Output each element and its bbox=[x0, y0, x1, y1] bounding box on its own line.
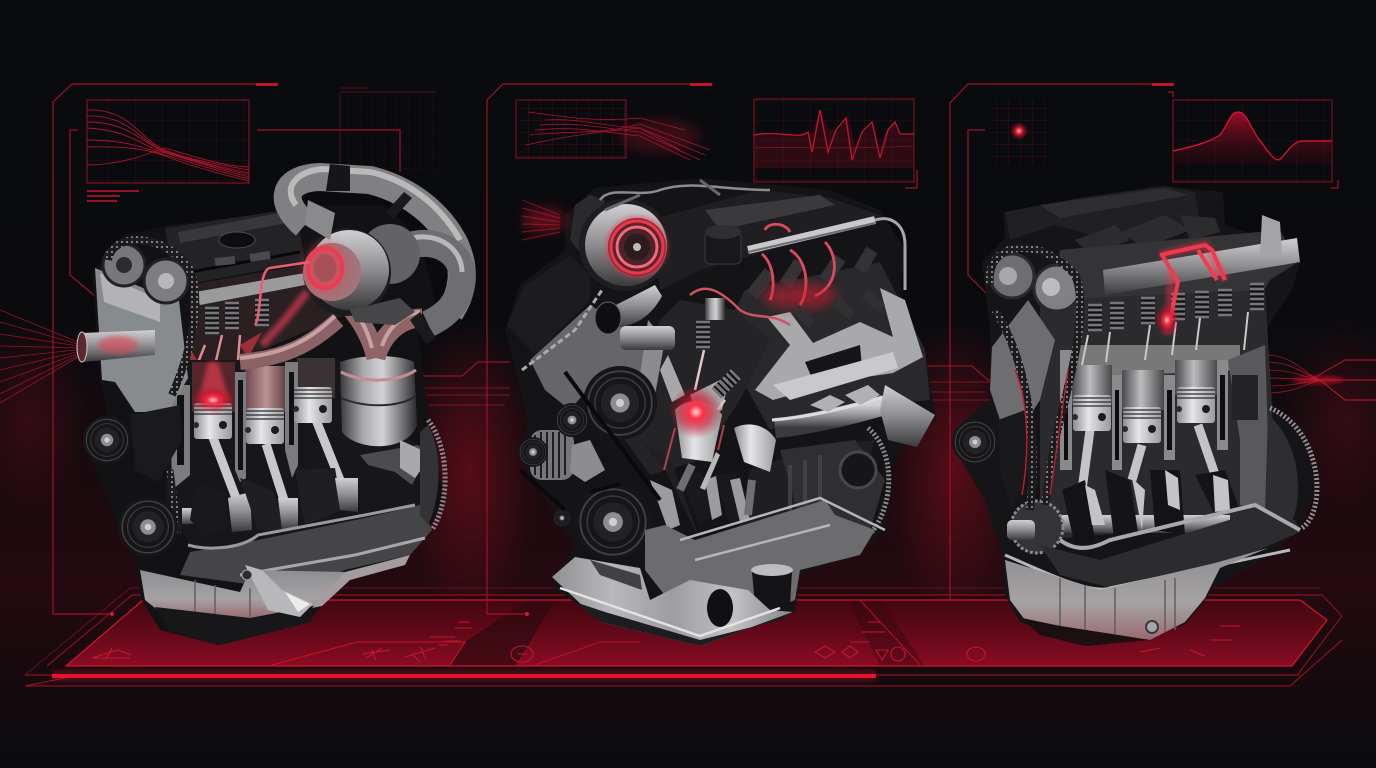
bracket silver mid bbox=[645, 500, 875, 640]
crankshaft bbox=[1020, 515, 1230, 533]
connecting rods bbox=[680, 465, 752, 515]
central cutaway bbox=[625, 300, 770, 475]
sump bbox=[1005, 548, 1268, 640]
heat shield bracket bbox=[360, 445, 428, 485]
lower block bbox=[640, 440, 875, 540]
connecting rods bbox=[1082, 425, 1222, 495]
pistons bbox=[193, 403, 232, 439]
left timing plate bbox=[990, 300, 1055, 435]
panel 1 frame bbox=[53, 83, 400, 616]
right head bbox=[720, 262, 930, 430]
silhouette bbox=[84, 205, 445, 645]
block interior bbox=[165, 360, 425, 545]
block bbox=[1040, 290, 1275, 540]
turbo housing bbox=[579, 199, 671, 291]
pink exhaust manifold bbox=[240, 320, 338, 362]
sump bbox=[552, 557, 793, 646]
pistons bbox=[675, 402, 722, 462]
injector lines red bbox=[762, 224, 834, 305]
intake flare bbox=[522, 200, 567, 240]
injector bodies bbox=[752, 250, 872, 295]
timing chain bbox=[108, 240, 195, 395]
cylinders bbox=[1072, 365, 1112, 405]
oil filter bbox=[752, 568, 792, 612]
connecting rods bbox=[212, 435, 236, 498]
valve springs bbox=[1088, 305, 1102, 330]
circuit traces bbox=[410, 362, 1000, 405]
flywheel bbox=[868, 428, 889, 532]
top pipework bbox=[600, 186, 770, 200]
right casting bbox=[1228, 345, 1275, 510]
oil line and red spray bbox=[255, 262, 310, 325]
head section bbox=[190, 262, 345, 375]
floor tick marks bbox=[430, 622, 1240, 645]
combustion glow bbox=[198, 362, 230, 403]
turbo mount bbox=[350, 298, 415, 325]
engine 2: V-type cutaway bbox=[505, 178, 936, 646]
floor dark strip bbox=[450, 600, 555, 666]
turbo rear bbox=[570, 195, 605, 265]
panel 1 chart: faint grid bbox=[340, 88, 436, 172]
coil packs bbox=[1075, 215, 1220, 255]
timing plate bbox=[95, 268, 188, 412]
injector glow bbox=[762, 284, 838, 308]
rocker arms bbox=[795, 288, 885, 328]
hose couplers bbox=[326, 164, 350, 191]
head castings red bbox=[188, 332, 262, 372]
silhouette bbox=[505, 178, 936, 646]
head bbox=[1050, 230, 1298, 345]
silhouette bbox=[955, 186, 1316, 646]
cylinder walls bbox=[170, 362, 298, 490]
cylinder walls bbox=[1060, 350, 1228, 470]
floor icons bbox=[92, 646, 1205, 662]
intake pipe bbox=[82, 330, 155, 362]
cylinder liners bbox=[192, 362, 235, 412]
panel 2 chart: flow lines bbox=[516, 100, 710, 160]
alternator bbox=[530, 430, 574, 480]
turbo bbox=[360, 224, 420, 284]
panel 2 chart: pressure spikes bbox=[754, 99, 917, 188]
red oil gallery bbox=[1160, 245, 1225, 320]
flywheel bbox=[428, 420, 445, 530]
left radial wave bbox=[0, 310, 85, 403]
engine mount bbox=[245, 565, 313, 617]
dark top cover bbox=[650, 190, 880, 290]
panel 3 frame bbox=[950, 83, 1174, 600]
valve stems bbox=[695, 350, 725, 420]
cutaway line bbox=[690, 289, 790, 325]
sump bbox=[140, 570, 345, 618]
pulleys bbox=[83, 416, 131, 464]
panel 1 chart: curve family bbox=[87, 100, 249, 201]
pulleys bbox=[583, 366, 657, 440]
crankshaft bbox=[680, 470, 745, 525]
valve cover bbox=[165, 210, 305, 283]
pistons bbox=[1072, 395, 1111, 431]
hoses bbox=[288, 177, 462, 312]
valve deck bbox=[755, 288, 923, 400]
catalyst bbox=[340, 356, 417, 446]
oil cap bbox=[705, 232, 741, 264]
cam cover bbox=[1005, 186, 1200, 240]
right waveform bbox=[1265, 355, 1376, 400]
background red glow behind engines bbox=[0, 320, 1376, 620]
crankshaft bbox=[182, 508, 212, 524]
timing chain bbox=[990, 248, 1080, 505]
cam gears bbox=[103, 244, 145, 286]
panel 3 chart: target grid bbox=[990, 100, 1048, 164]
fuel rail bbox=[748, 220, 875, 250]
left timing cover bbox=[507, 255, 590, 355]
pan rails bbox=[1040, 512, 1300, 590]
valve springs bbox=[205, 308, 219, 333]
engine 1: turbocharged cutaway bbox=[77, 164, 462, 645]
sump black tray bbox=[1022, 618, 1150, 646]
floor platform bbox=[25, 588, 1342, 686]
crank pulley bbox=[952, 419, 998, 465]
cam gears bbox=[990, 254, 1034, 298]
panel 3 chart: torque curve bbox=[1168, 92, 1338, 188]
engine 3: inline cutaway bbox=[952, 186, 1317, 646]
thick floor bar bbox=[52, 674, 876, 678]
serpentine belt bbox=[520, 372, 660, 510]
intake tube and manifold bbox=[610, 285, 662, 328]
flywheel bbox=[1270, 408, 1317, 528]
exhaust header bbox=[775, 405, 885, 428]
panel 2 frame bbox=[487, 83, 712, 616]
pan rails bbox=[180, 505, 432, 590]
sump black tray bbox=[155, 607, 312, 645]
